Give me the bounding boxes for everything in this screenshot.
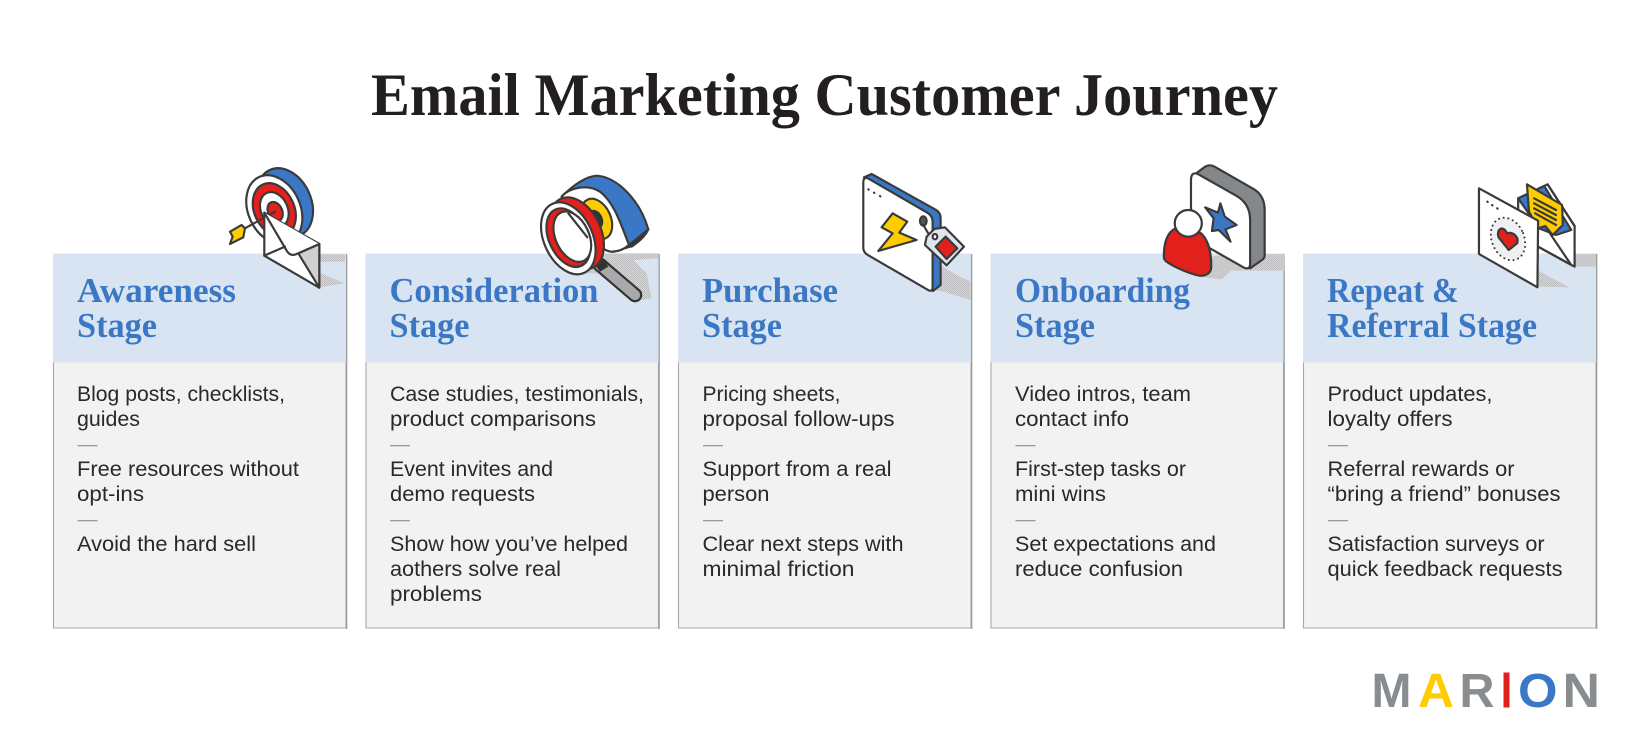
body panel: onboarding (991, 362, 1284, 628)
text list: awareness: Free resources without (77, 457, 299, 481)
heading: purchase: Purchase (702, 271, 838, 310)
heading: onboarding: Stage (1015, 306, 1095, 345)
text list: consideration: Case studies, testimonials, (390, 382, 644, 406)
text list: purchase: Clear next steps with (702, 532, 904, 556)
heading: purchase (702, 271, 838, 345)
heading: repeat and referral: Repeat & (1327, 271, 1459, 310)
text list: purchase (702, 382, 904, 581)
panel: awareness stage (53, 254, 347, 629)
panel: repeat and referral stage (1303, 254, 1597, 629)
text list: repeat and referral: Satisfaction surveys or (1328, 532, 1544, 556)
text list: repeat and referral: quick feedback requests (1328, 557, 1562, 581)
body panel: repeat and referral (1304, 362, 1596, 628)
text list: purchase: proposal follow-ups (702, 407, 894, 431)
panel: onboarding stage (990, 254, 1285, 629)
text list: onboarding: mini wins (1015, 482, 1106, 506)
logo: MARION: O (1518, 664, 1558, 718)
text list: consideration: product comparisons (390, 407, 596, 431)
heading: onboarding (1015, 271, 1190, 345)
panel: consideration stage (366, 254, 660, 629)
text list: onboarding: Video intros, team (1015, 382, 1191, 406)
text list: awareness: Blog posts, checklists, (77, 382, 285, 406)
text list: consideration (390, 382, 644, 606)
text list: repeat and referral (1328, 382, 1562, 581)
text list: consideration: Event invites and (390, 457, 553, 481)
heading: awareness: Awareness (77, 271, 236, 310)
text list: repeat and referral: “bring a friend” bonuses (1328, 482, 1560, 506)
text list: awareness: guides (77, 407, 140, 431)
text list: consideration: aothers solve real (390, 557, 561, 581)
header band: awareness (53, 254, 347, 362)
heading: repeat and referral (1327, 271, 1537, 345)
text list: purchase: Pricing sheets, (702, 382, 840, 406)
header band: repeat and referral (1303, 254, 1597, 362)
heading: consideration (390, 271, 598, 345)
heading: onboarding: Onboarding (1015, 271, 1190, 310)
icon: person with star card (1164, 165, 1285, 279)
header band: onboarding (990, 254, 1284, 362)
body panel: awareness (54, 362, 346, 628)
icon: love letter and envelope (1479, 184, 1596, 287)
text list: repeat and referral: Product updates, (1328, 382, 1492, 406)
text list: onboarding: First-step tasks or (1015, 457, 1186, 481)
logo: MARION: A (1418, 664, 1454, 718)
text list: repeat and referral: loyalty offers (1328, 407, 1452, 431)
icon: target and envelope (230, 159, 345, 288)
heading: consideration: Consideration (390, 271, 598, 310)
text list: onboarding: Set expectations and (1015, 532, 1216, 556)
text list: onboarding: reduce confusion (1015, 557, 1183, 581)
logo: MARION: N (1562, 664, 1600, 718)
text list: purchase: minimal friction (702, 557, 854, 581)
heading: awareness (77, 271, 236, 345)
heading: consideration: Stage (390, 306, 470, 345)
text list: consideration: Show how you’ve helped (390, 532, 628, 556)
heading: awareness: Stage (77, 306, 157, 345)
title: Email Marketing Customer Journey (371, 62, 1278, 128)
icon: magnifier over eye (530, 176, 658, 300)
heading: repeat and referral: Referral Stage (1327, 306, 1537, 345)
heading: purchase: Stage (702, 306, 782, 345)
text list: awareness (77, 382, 299, 556)
body panel: purchase (678, 362, 971, 628)
icon: browser window with lightning and price tag (863, 174, 971, 300)
text list: purchase: person (702, 482, 770, 506)
logo: MARION: M (1372, 664, 1412, 718)
text list: onboarding (1015, 382, 1216, 581)
body panel: consideration (366, 362, 658, 628)
text list: repeat and referral: Referral rewards or (1328, 457, 1514, 481)
text list: awareness: Avoid the hard sell (77, 532, 256, 556)
logo: MARION: R (1460, 664, 1494, 718)
header band: consideration (366, 254, 660, 362)
text list: consideration: demo requests (390, 482, 535, 506)
panel: purchase stage (678, 254, 972, 629)
logo: MARION (1372, 664, 1600, 718)
text list: onboarding: contact info (1015, 407, 1129, 431)
text list: awareness: opt-ins (77, 482, 144, 506)
text list: consideration: problems (390, 582, 482, 606)
header band: purchase (678, 254, 972, 362)
text list: purchase: Support from a real (702, 457, 892, 481)
